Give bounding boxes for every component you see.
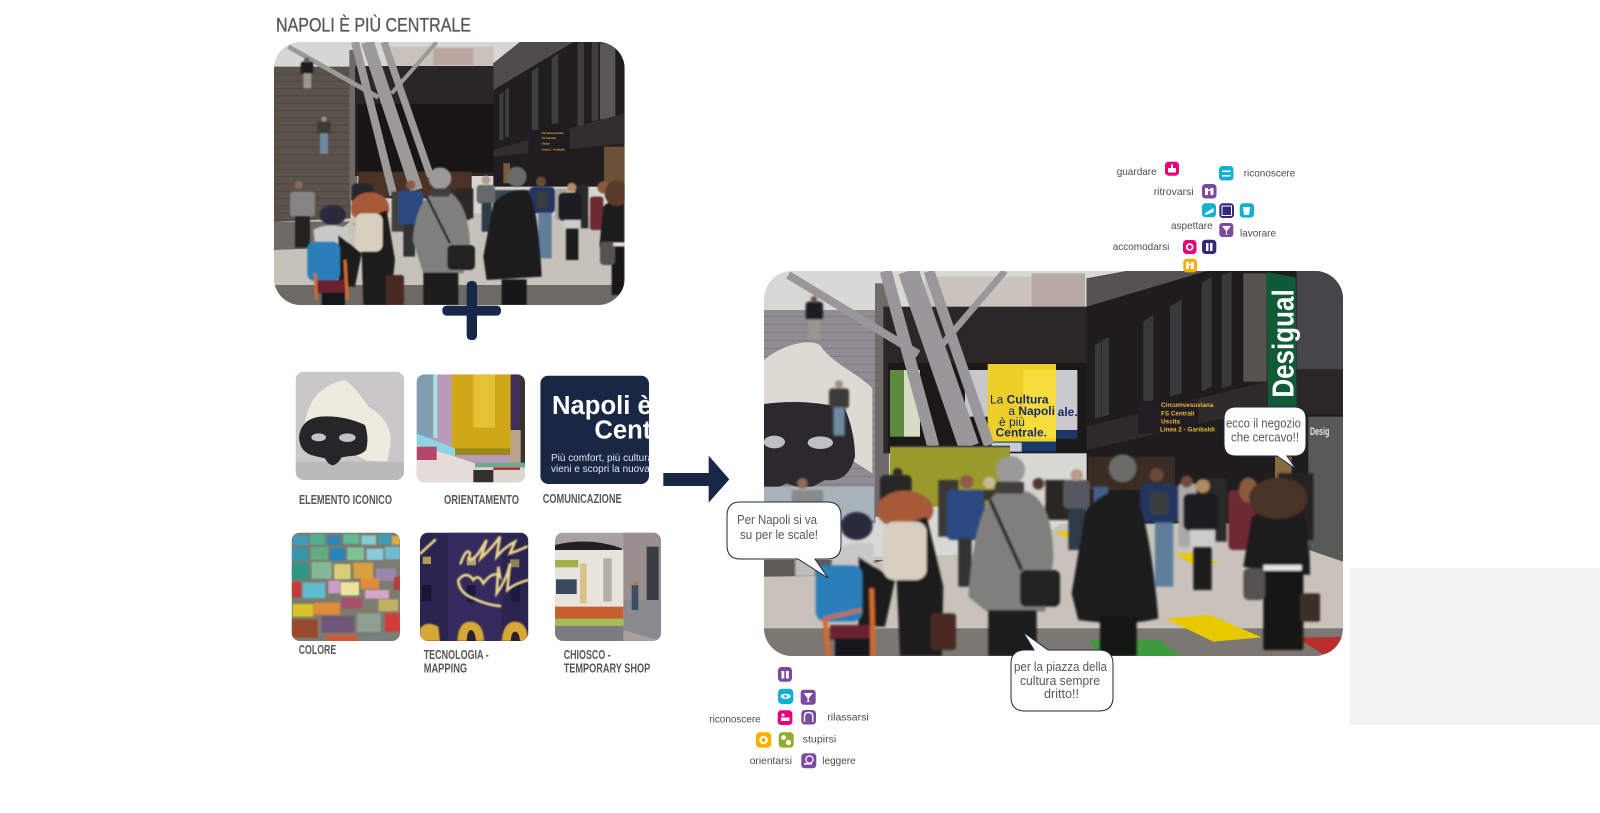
icon: restaurant — [756, 732, 771, 748]
speech bubble: shop — [1224, 407, 1306, 469]
icon: reading — [801, 753, 816, 768]
icon: aspettare — [1202, 203, 1216, 217]
speech bubble: shop: che cercavo!! — [1231, 431, 1299, 445]
icon: metro — [801, 710, 816, 724]
label: accomodarsi: accomodarsi — [1113, 241, 1169, 253]
grey background panel — [1350, 568, 1600, 725]
icon: bed — [778, 710, 792, 725]
label: lavorare: lavorare — [1240, 228, 1276, 240]
speech bubble: stairs — [727, 502, 841, 578]
photo: station square, after intervention: è più — [999, 415, 1025, 429]
photo: station square, before: Linea 2 - Garibaldi — [542, 147, 565, 151]
icon cluster: bottom activities — [709, 667, 869, 768]
label: technology mapping: MAPPING — [424, 662, 467, 676]
label: leggere: leggere — [822, 755, 856, 767]
photo: station square, before — [274, 42, 629, 306]
photo: station square, after intervention: Circumvesuviana — [1161, 402, 1214, 409]
label: orientation: ORIENTAMENTO — [444, 493, 519, 507]
image: wayfinding architecture — [417, 374, 525, 482]
photo: station square, after intervention: FS Centrali — [1161, 410, 1195, 417]
photo: station square, after intervention: a Napoli — [1008, 404, 1055, 418]
photo: station square, after intervention: Centrale. — [996, 426, 1047, 440]
speech bubble: culture square: dritto!! — [1044, 687, 1079, 701]
label: iconic element: ELEMENTO ICONICO — [299, 493, 392, 507]
photo: station square, before: Uscita — [542, 141, 550, 145]
speech bubble: culture square: cultura sempre — [1020, 674, 1100, 688]
label: orientarsi: orientarsi — [750, 755, 792, 767]
label: kiosk temporary shop: TEMPORARY SHOP — [564, 662, 650, 676]
photo: station square, after intervention: La Cultura — [990, 392, 1049, 406]
photo: station square, after intervention: Desigual — [1266, 289, 1300, 398]
label: kiosk temporary shop — [564, 648, 650, 676]
image: temporary shop kiosk — [555, 533, 661, 641]
image: communication poster: Napoli è — [552, 392, 652, 420]
icon: door — [1219, 203, 1234, 218]
icon: cocktail — [801, 690, 816, 705]
icon: people — [778, 667, 792, 682]
icon: people — [1202, 240, 1216, 254]
icon: ritrovarsi — [1202, 184, 1216, 198]
icon: plus sign — [442, 281, 501, 340]
image: communication poster: vieni e scopri la nuova — [551, 464, 650, 475]
speech bubble: culture square — [1011, 632, 1113, 711]
label: riconoscere: riconoscere — [709, 714, 761, 726]
image: communication poster: Centrale — [594, 416, 697, 444]
label: ritrovarsi: ritrovarsi — [1154, 186, 1194, 198]
photo: station square, after intervention — [764, 271, 1343, 657]
photo: station square, after intervention: Uscita — [1161, 418, 1180, 425]
photo: station square, before: Circumvesuviana — [542, 131, 564, 135]
icon: guardare — [1165, 162, 1179, 176]
icon: cocktail — [1219, 223, 1233, 237]
icon: riconoscere arrows — [1219, 166, 1234, 180]
label: technology mapping — [424, 648, 489, 676]
icon: surprise — [779, 732, 794, 748]
image: colour mosaic — [292, 533, 400, 641]
label: kiosk temporary shop: CHIOSCO - — [564, 648, 611, 662]
label: communication: COMUNICAZIONE — [543, 492, 622, 506]
icon: eye — [778, 689, 793, 704]
image: communication poster — [540, 376, 649, 484]
speech bubble: stairs: Per Napoli si va — [737, 513, 817, 527]
icon: restaurant — [1183, 240, 1196, 254]
speech bubble: shop: ecco il negozio — [1226, 417, 1301, 431]
icon cluster: top activities — [1113, 162, 1295, 272]
label: colour: COLORE — [299, 643, 336, 657]
icon: arrow right — [663, 456, 729, 503]
icon: meeting — [1183, 259, 1197, 272]
label: technology mapping: TECNOLOGIA - — [424, 648, 489, 662]
photo: station square, before: FS Centrali — [542, 136, 556, 140]
label: guardare: guardare — [1117, 166, 1157, 178]
image: communication poster: Più comfort, più cultura — [551, 453, 654, 464]
photo: station square, after intervention: ale. — [1058, 405, 1078, 419]
label: rilassarsi: rilassarsi — [827, 712, 869, 724]
label: riconoscere: riconoscere — [1244, 168, 1295, 180]
label: aspettare: aspettare — [1171, 220, 1213, 232]
speech bubble: stairs: su per le scale! — [740, 528, 818, 542]
image: projection mapping on facade — [420, 533, 528, 641]
icon: drink — [1240, 203, 1254, 218]
title: NAPOLI È PIÙ CENTRALE — [276, 15, 471, 37]
speech bubble: culture square: per la piazza della — [1014, 660, 1107, 674]
photo: station square, after intervention: Linea 2 - Garibaldi — [1160, 427, 1215, 434]
photo: station square, after intervention: Desig — [1310, 426, 1329, 438]
image: iconic element, Pulcinella mask — [296, 372, 404, 480]
label: stupirsi: stupirsi — [803, 734, 836, 746]
